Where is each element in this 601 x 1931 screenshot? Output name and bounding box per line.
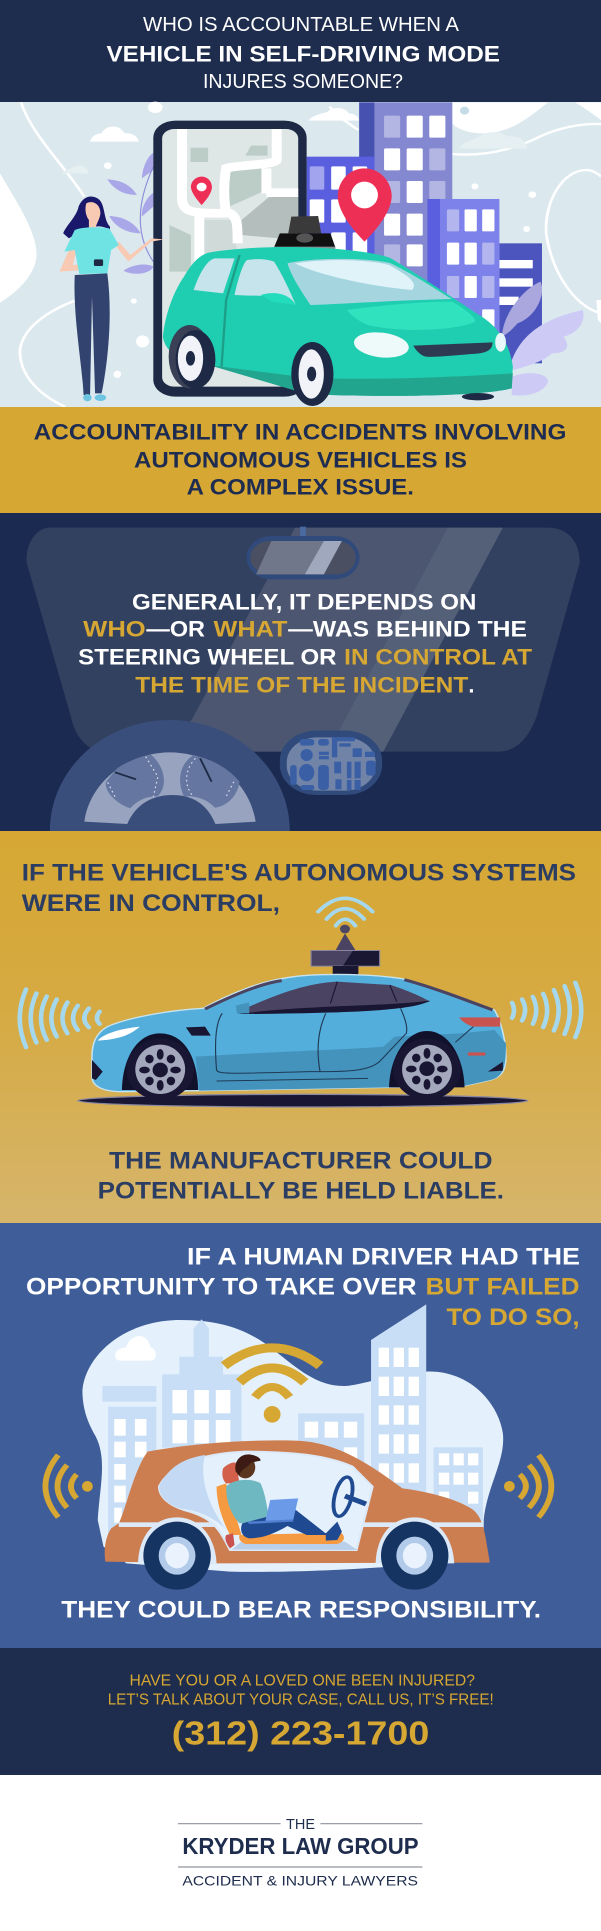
conclusion: POTENTIALLY BE HELD LIABLE. [98, 1177, 504, 1204]
teal car [163, 247, 513, 406]
heading: TO DO SO, [446, 1304, 580, 1331]
plant right [502, 282, 584, 396]
rear wheel [389, 1031, 465, 1100]
statement text [78, 589, 533, 698]
navigation screen [280, 731, 382, 795]
sensor waves right [512, 983, 581, 1037]
heading [26, 1244, 580, 1331]
phone number: (312) 223-1700 [172, 1714, 429, 1751]
background blobs and curves [0, 102, 601, 407]
panel: human driver failed to take over [0, 1223, 601, 1648]
seat [217, 1462, 344, 1548]
heading: IF A HUMAN DRIVER HAD THE [187, 1244, 580, 1271]
statement text: GENERALLY, IT DEPENDS ON [132, 589, 476, 614]
clouds [61, 108, 527, 173]
title line 1: WHO IS ACCOUNTABLE WHEN A [143, 14, 460, 36]
wheels [138, 1517, 454, 1563]
statement text: —OR [146, 617, 205, 642]
title line 2: VEHICLE IN SELF-DRIVING MODE [106, 41, 500, 66]
roof sensor [310, 925, 380, 975]
statement text [34, 419, 566, 500]
call to action text: LET’S TALK ABOUT YOUR CASE, CALL US, IT’S FREE! [108, 1691, 494, 1708]
conclusion: THEY COULD BEAR RESPONSIBILITY. [61, 1596, 541, 1623]
call to action text [108, 1672, 494, 1708]
orange car [105, 1440, 490, 1590]
plant behind phone [107, 153, 153, 274]
panel: logo [0, 1775, 601, 1931]
city and car illustration [45, 1304, 551, 1590]
panel: behind the wheel [0, 513, 601, 831]
map pin [338, 168, 392, 242]
logo: tagline: ACCIDENT & INJURY LAWYERS [182, 1873, 418, 1889]
panel: complexity statement [0, 407, 601, 513]
woman with phone [59, 197, 164, 401]
statement text: STEERING WHEEL OR [78, 645, 337, 670]
city blob [82, 1320, 503, 1572]
windshield and dashboard [27, 527, 580, 942]
buildings [102, 1304, 483, 1533]
panel: call to action [0, 1648, 601, 1775]
logo: firm name: KRYDER LAW GROUP [182, 1833, 419, 1859]
steering wheel [330, 1476, 366, 1518]
antenna signal [318, 898, 373, 926]
panel: header [0, 0, 601, 102]
wifi icon [224, 1348, 320, 1423]
panel: hero illustration [0, 102, 601, 407]
statement text: AUTONOMOUS VEHICLES IS [134, 447, 467, 472]
statement text: ACCOUNTABILITY IN ACCIDENTS INVOLVING [34, 419, 566, 444]
heading [22, 860, 576, 917]
front wheel [122, 1033, 198, 1100]
phone with map [153, 121, 307, 397]
rear-view mirror [246, 536, 360, 579]
statement text: —WAS BEHIND THE [288, 617, 527, 642]
statement text: THE TIME OF THE INCIDENT [135, 673, 469, 698]
blue sedan with sensor [20, 898, 581, 1107]
statement text: WHAT [214, 617, 288, 642]
cloud [115, 1336, 156, 1361]
heading: OPPORTUNITY TO TAKE OVER [26, 1274, 417, 1301]
heading: BUT FAILED [426, 1274, 580, 1301]
ground shadow [78, 1094, 528, 1107]
city buildings [307, 102, 542, 363]
call to action text: HAVE YOU OR A LOVED ONE BEEN INJURED? [130, 1672, 475, 1689]
heading: IF THE VEHICLE'S AUTONOMOUS SYSTEMS [22, 860, 576, 887]
statement text: A COMPLEX ISSUE. [187, 475, 414, 500]
steering wheel and gauges [50, 720, 290, 831]
panel: autonomous systems in control [0, 831, 601, 1223]
heading: WERE IN CONTROL, [22, 890, 280, 917]
sensor waves left [20, 989, 100, 1047]
statement text: . [468, 673, 475, 698]
signal left [45, 1455, 93, 1517]
statement text: IN CONTROL AT [344, 645, 533, 670]
roof sensor [274, 216, 335, 250]
car body [92, 974, 506, 1092]
title line 3: INJURES SOMEONE? [203, 71, 403, 93]
conclusion [98, 1148, 504, 1204]
man with laptop [226, 1454, 342, 1541]
statement text: WHO [83, 617, 146, 642]
signal right [504, 1455, 551, 1517]
logo: the: THE [286, 1816, 315, 1833]
conclusion: THE MANUFACTURER COULD [109, 1148, 492, 1175]
